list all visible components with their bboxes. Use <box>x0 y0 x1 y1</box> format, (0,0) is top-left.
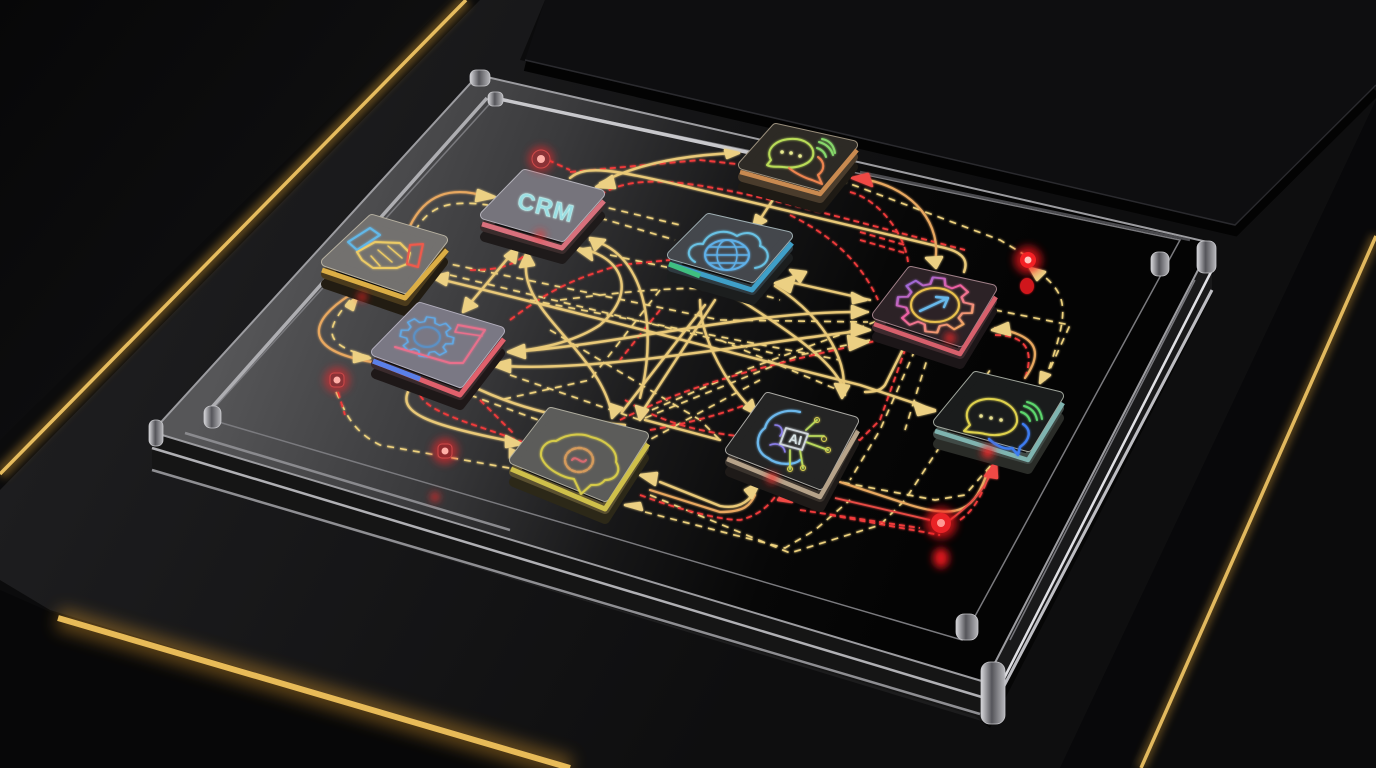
red node: lower right <box>925 507 957 568</box>
gold light strip: right <box>1141 236 1376 768</box>
red node: right <box>1014 246 1042 294</box>
tile: gear with arrow <box>874 271 996 364</box>
red dashed routes <box>338 160 1029 535</box>
red node: lower left <box>432 438 458 464</box>
icon: cloud and globe <box>689 232 768 270</box>
glass board frame <box>149 70 1216 728</box>
icon: chat bubbles with signal <box>767 139 835 184</box>
red node: top <box>528 146 554 172</box>
arrowheads <box>346 150 1050 510</box>
red node: left <box>324 367 350 393</box>
gold light strip: bottom left <box>58 618 570 768</box>
label: AI: AI <box>787 430 804 448</box>
tile: right chat <box>935 376 1063 469</box>
icon: thought cloud with brain <box>541 434 618 494</box>
tile: CRM <box>482 174 604 259</box>
dashed gold routes <box>332 180 1070 553</box>
icon: gear with arrow <box>894 274 976 336</box>
tile: AI brain <box>727 397 858 507</box>
icon: handshake <box>348 228 423 268</box>
corner posts <box>149 70 1216 724</box>
solid gold routes <box>319 153 1035 520</box>
tile: cloud <box>669 218 792 300</box>
connector network <box>319 150 1070 553</box>
gold light strip: upper left <box>0 0 466 474</box>
tile: top chat <box>740 128 857 208</box>
tile: gear and document <box>373 307 504 405</box>
tile: brain <box>511 412 648 519</box>
label: CRM: CRM <box>515 188 577 228</box>
icon: gear and document <box>395 314 485 363</box>
tile: handshake <box>322 219 447 311</box>
red glows on tile edges <box>358 230 994 501</box>
icon: chat bubbles with signal <box>964 399 1042 455</box>
